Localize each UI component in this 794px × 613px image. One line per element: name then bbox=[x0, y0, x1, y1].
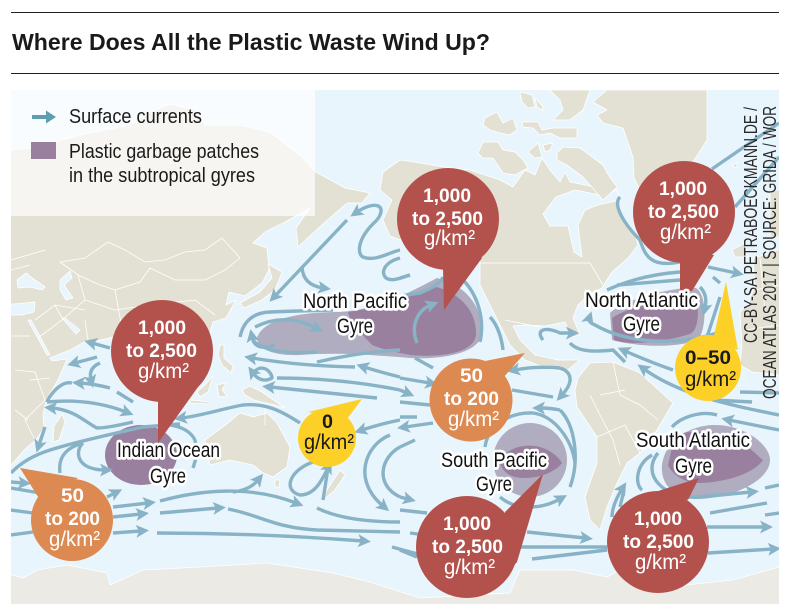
label: Indian Ocean Gyre: Indian Ocean bbox=[117, 439, 220, 462]
bubble: North Pacific 1,000 to 2,500: g/km² bbox=[424, 227, 475, 250]
bubble: North Atlantic 0 to 50: 0–50 bbox=[685, 348, 731, 369]
garbage patch: South Atlantic bbox=[662, 425, 770, 499]
bubble: Pacific 50 to 200: g/km² bbox=[448, 408, 499, 431]
label: South Pacific Gyre bbox=[441, 449, 547, 496]
bubble: North Atlantic 1,000 to 2,500: to 2,500 bbox=[648, 202, 719, 223]
credits bbox=[741, 106, 780, 399]
North America bbox=[380, 158, 638, 372]
credits: CC-BY-SA PETRABOECKMANN.DE / bbox=[741, 107, 761, 343]
label: South Atlantic Gyre: South Atlantic bbox=[636, 429, 750, 452]
New Zealand bbox=[323, 470, 345, 500]
label: South Pacific Gyre: Gyre bbox=[476, 473, 512, 496]
Japan bbox=[240, 264, 282, 308]
bubble: North Pacific 1,000 to 2,500 bbox=[397, 168, 499, 310]
label: North Atlantic Gyre: North Atlantic bbox=[585, 289, 698, 312]
bubble: Pacific 50 to 200: to 200 bbox=[444, 389, 499, 410]
Australia bbox=[205, 413, 290, 477]
surface currents bbox=[11, 123, 779, 559]
Hudson Bay bbox=[543, 190, 620, 257]
bubble: South Atlantic 1,000 to 2,500 bbox=[607, 478, 709, 593]
bubble: North Atlantic 0 to 50: g/km² bbox=[685, 368, 736, 391]
Sulawesi bbox=[217, 383, 227, 397]
label: North Pacific Gyre bbox=[303, 290, 407, 338]
bubble: Indian Ocean 50 to 200 bbox=[20, 468, 113, 561]
bubble: Pacific 0: g/km² bbox=[304, 431, 354, 454]
legend: plastic garbage patches: in the subtropical gyres bbox=[69, 164, 255, 187]
bubble: Indian Ocean 50 to 200: to 200 bbox=[45, 509, 100, 530]
Philippines bbox=[218, 345, 233, 373]
bubble: North Atlantic 0 to 50 bbox=[675, 282, 741, 401]
bubble: Pacific 50 to 200 bbox=[430, 353, 525, 442]
bubble: North Atlantic 1,000 to 2,500: g/km² bbox=[660, 221, 711, 244]
label: Indian Ocean Gyre bbox=[117, 439, 220, 488]
bubble: Indian Ocean 1,000 to 2,500 bbox=[111, 300, 213, 443]
bubble: Indian Ocean 50 to 200: 50 bbox=[61, 486, 84, 507]
garbage patch: North Pacific bbox=[257, 278, 482, 358]
bubble: South Pacific 1,000 to 2,500: 1,000 bbox=[443, 514, 491, 535]
Northern Europe bbox=[770, 189, 779, 238]
label: South Atlantic Gyre: Gyre bbox=[675, 455, 712, 478]
bubble: North Atlantic 1,000 to 2,500: 1,000 bbox=[659, 179, 707, 200]
bubble: Indian Ocean 1,000 to 2,500: g/km² bbox=[138, 360, 189, 383]
bubble: North Atlantic 1,000 to 2,500 bbox=[633, 161, 735, 291]
label: South Pacific Gyre: South Pacific bbox=[441, 449, 547, 472]
Antarctica bbox=[11, 562, 779, 604]
bubble: South Atlantic 1,000 to 2,500: g/km² bbox=[635, 551, 686, 574]
Madagascar bbox=[53, 414, 65, 442]
bubble: Pacific 0: 0 bbox=[322, 412, 333, 433]
label: North Atlantic Gyre bbox=[585, 289, 698, 336]
legend: surface currents: Surface currents bbox=[69, 105, 202, 128]
Eurasia and Africa bbox=[5, 104, 370, 470]
label: Indian Ocean Gyre: Gyre bbox=[150, 465, 186, 488]
Borneo bbox=[197, 376, 213, 397]
Iceland and British Isles bbox=[732, 163, 738, 168]
Java bbox=[190, 400, 210, 404]
bubble: North Pacific 1,000 to 2,500: 1,000 bbox=[423, 186, 471, 207]
bubble: Pacific 50 to 200: 50 bbox=[460, 366, 483, 387]
Greenland bbox=[593, 90, 707, 190]
label: North Atlantic Gyre: Gyre bbox=[623, 313, 660, 336]
bubble: South Pacific 1,000 to 2,500: g/km² bbox=[444, 556, 495, 579]
bubble: North Pacific 1,000 to 2,500: to 2,500 bbox=[412, 209, 483, 230]
country borders bbox=[11, 238, 779, 465]
gyre labels bbox=[117, 289, 750, 496]
South America bbox=[575, 362, 673, 530]
bubble: Indian Ocean 50 to 200: g/km² bbox=[49, 528, 100, 551]
bubble: South Atlantic 1,000 to 2,500: to 2,500 bbox=[623, 532, 694, 553]
Arctic archipelago bbox=[520, 92, 535, 108]
legend: plastic garbage patches bbox=[31, 140, 259, 187]
title: Where Does All the Plastic Waste Wind Up? bbox=[12, 29, 490, 55]
bubble: Indian Ocean 1,000 to 2,500: 1,000 bbox=[138, 318, 186, 339]
garbage patch: South Pacific bbox=[493, 423, 567, 497]
garbage patch: North Atlantic bbox=[610, 288, 704, 346]
label: North Pacific Gyre: Gyre bbox=[337, 315, 373, 338]
bubble: Indian Ocean 1,000 to 2,500: to 2,500 bbox=[126, 341, 197, 362]
legend: plastic garbage patches: Plastic garbage patches bbox=[69, 140, 259, 163]
Europe and North Africa bbox=[740, 249, 779, 376]
inland seas bbox=[17, 273, 45, 290]
label: South Atlantic Gyre bbox=[636, 429, 750, 478]
bubble: South Atlantic 1,000 to 2,500: 1,000 bbox=[634, 509, 682, 530]
legend bbox=[11, 90, 315, 216]
label: North Pacific Gyre: North Pacific bbox=[303, 290, 407, 313]
bubble: Pacific 0 bbox=[298, 399, 362, 467]
garbage patch: Indian Ocean bbox=[105, 425, 177, 485]
credits: OCEAN ATLAS 2017 | SOURCE: GRIDA / WOR bbox=[760, 106, 780, 399]
New Guinea bbox=[242, 386, 285, 408]
bubble: South Pacific 1,000 to 2,500 bbox=[416, 474, 543, 598]
bubble: South Pacific 1,000 to 2,500: to 2,500 bbox=[432, 537, 503, 558]
